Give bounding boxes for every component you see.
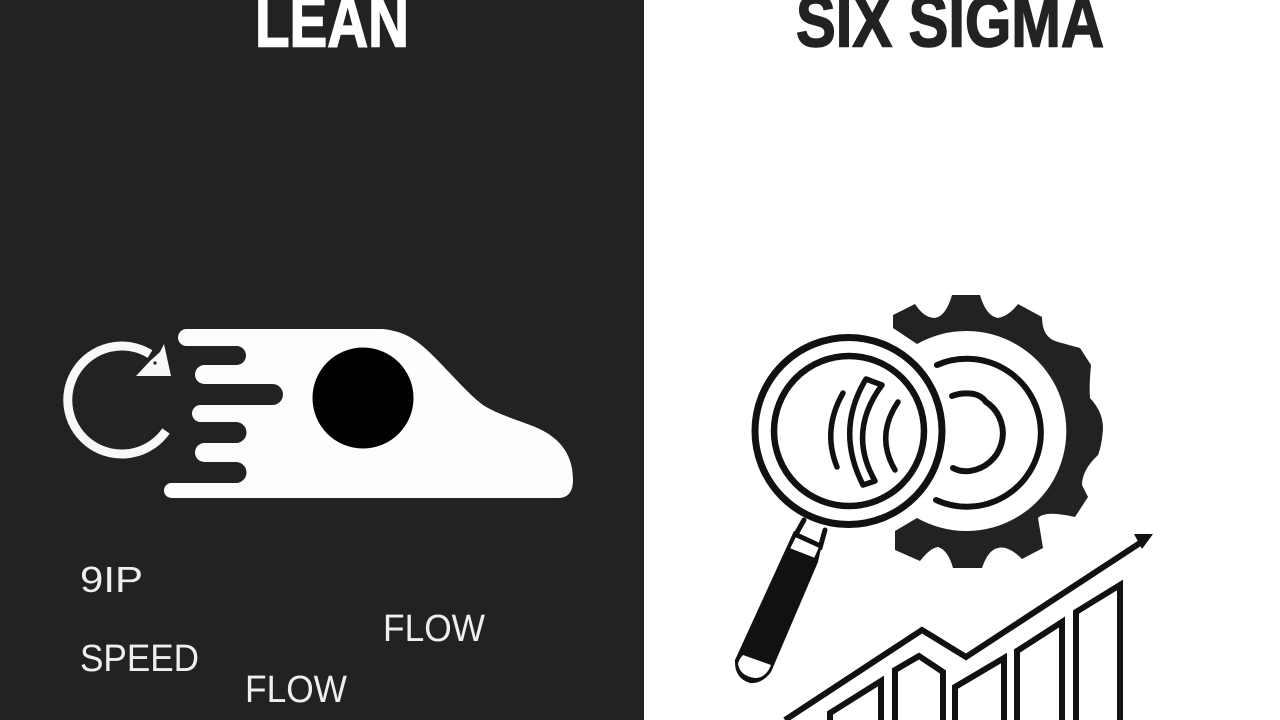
inner ring arc [952,393,1003,471]
icon: circular arrow [68,344,171,454]
handle end cap [738,655,771,678]
handle grip [735,531,822,683]
panel: six sigma [644,0,1280,720]
label: flow right: FLOW [383,608,485,650]
outer ring arc [936,359,1041,507]
icon: gear [893,295,1103,568]
icon: fast-moving train [164,329,573,498]
label: speed: SPEED [80,638,199,680]
label: 9IP: 9IP [80,559,143,600]
icon: magnifying glass [735,338,942,683]
panel: lean [0,0,644,720]
handle collar [791,538,818,557]
chart: rising bars with arrow [785,534,1153,720]
handle neck [795,520,825,548]
label: flow lower: FLOW [245,669,347,711]
